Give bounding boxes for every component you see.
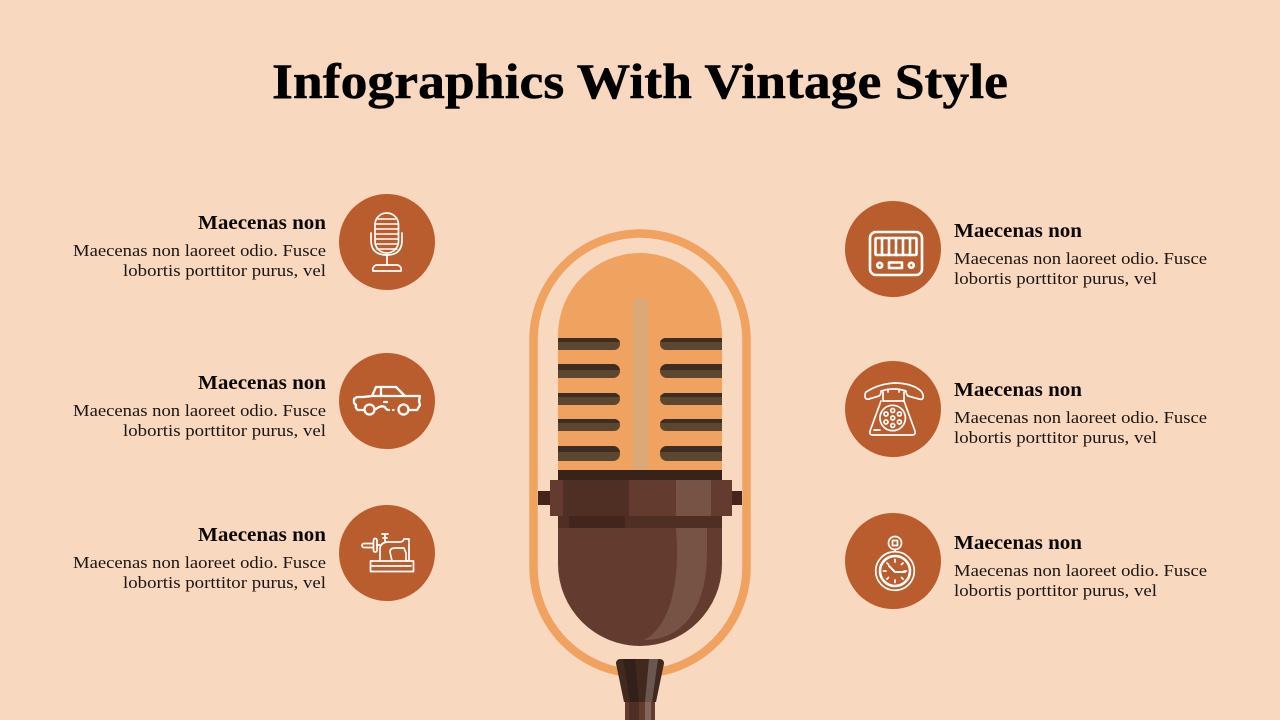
- text block: Maecenas non laoreet odio. Fusce: [954, 408, 1207, 427]
- text block: Maecenas non: [198, 213, 326, 234]
- text block: [954, 533, 1207, 600]
- icon: stopwatch: [845, 513, 941, 609]
- item: car (left 2): [73, 353, 435, 449]
- text block: Maecenas non: [954, 533, 1082, 554]
- text block: [73, 525, 326, 592]
- text block: Maecenas non laoreet odio. Fusce: [73, 241, 326, 260]
- microphone stand: [616, 659, 664, 720]
- text block: Maecenas non: [198, 525, 326, 546]
- text block: Maecenas non: [954, 221, 1082, 242]
- text block: lobortis porttitor purus, vel: [954, 428, 1157, 447]
- text block: [73, 373, 326, 440]
- text block: Maecenas non laoreet odio. Fusce: [73, 401, 326, 420]
- text block: lobortis porttitor purus, vel: [123, 421, 326, 440]
- item: microphone (left 1): [73, 194, 435, 290]
- icon: car: [339, 353, 435, 449]
- text block: Maecenas non laoreet odio. Fusce: [954, 561, 1207, 580]
- text block: Maecenas non: [198, 373, 326, 394]
- text block: lobortis porttitor purus, vel: [123, 573, 326, 592]
- microphone outline: [534, 234, 746, 674]
- microphone head: [558, 253, 722, 473]
- text block: Maecenas non laoreet odio. Fusce: [73, 553, 326, 572]
- text block: lobortis porttitor purus, vel: [123, 261, 326, 280]
- icon: sewing machine: [339, 505, 435, 601]
- icon: telephone: [845, 361, 941, 457]
- microphone body: [558, 528, 722, 646]
- text block: lobortis porttitor purus, vel: [954, 269, 1157, 288]
- text block: Maecenas non: [954, 380, 1082, 401]
- icon: radio: [845, 201, 941, 297]
- microphone collar: [538, 470, 742, 528]
- text block: Maecenas non laoreet odio. Fusce: [954, 249, 1207, 268]
- title: Infographics With Vintage Style: [272, 53, 1008, 109]
- item: telephone (right 2): [845, 361, 1207, 457]
- item: stopwatch (right 3): [845, 513, 1207, 609]
- text block: [954, 221, 1207, 288]
- item: sewing machine (left 3): [73, 505, 435, 601]
- icon: microphone: [339, 194, 435, 290]
- item: radio (right 1): [845, 201, 1207, 297]
- text block: [954, 380, 1207, 447]
- microphone illustration: [534, 234, 746, 720]
- text block: lobortis porttitor purus, vel: [954, 581, 1157, 600]
- text block: [73, 213, 326, 280]
